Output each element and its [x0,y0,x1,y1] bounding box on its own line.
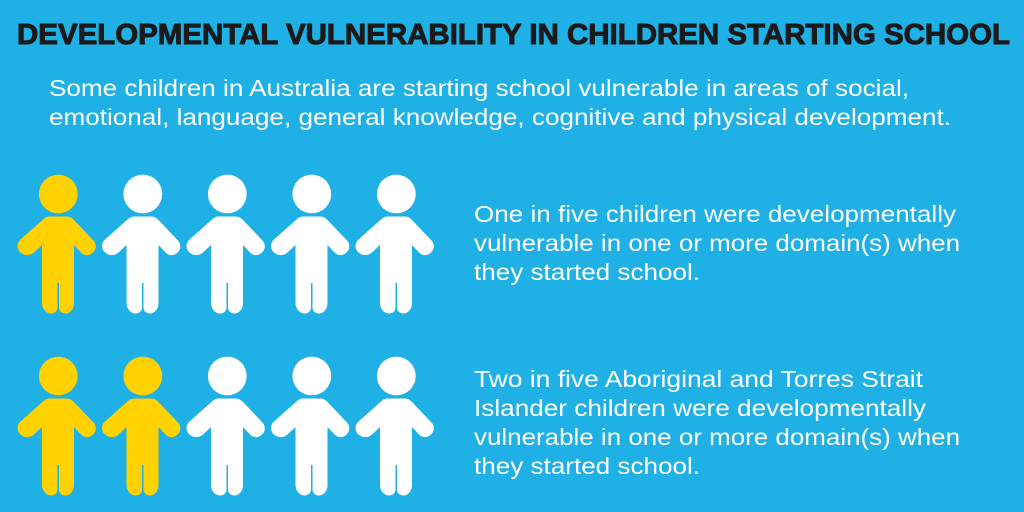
title: DEVELOPMENTAL VULNERABILITY IN CHILDREN STARTING SCHOOL [17,19,1010,51]
text: two in five: they started school. [474,453,700,479]
text: two in five: Islander children were developmentally [474,395,926,421]
intro text: Some children in Australia are starting school vulnerable in areas of social, [49,75,909,101]
text: two in five: vulnerable in one or more domain(s) when [474,424,960,450]
intro text [49,75,951,130]
text: one in five: vulnerable in one or more domain(s) when [474,230,960,256]
text: one in five: they started school. [474,259,700,285]
text: one in five: One in five children were developmentally [474,201,956,227]
intro text: emotional, language, general knowledge, cognitive and physical development. [49,104,951,130]
text: two in five: Two in five Aboriginal and Torres Strait [474,366,924,392]
text: one in five [474,201,960,285]
pictogram: one in five children [18,175,434,314]
text: two in five [474,366,960,479]
pictogram: two in five Aboriginal and Torres Strait Islander children [18,357,434,496]
